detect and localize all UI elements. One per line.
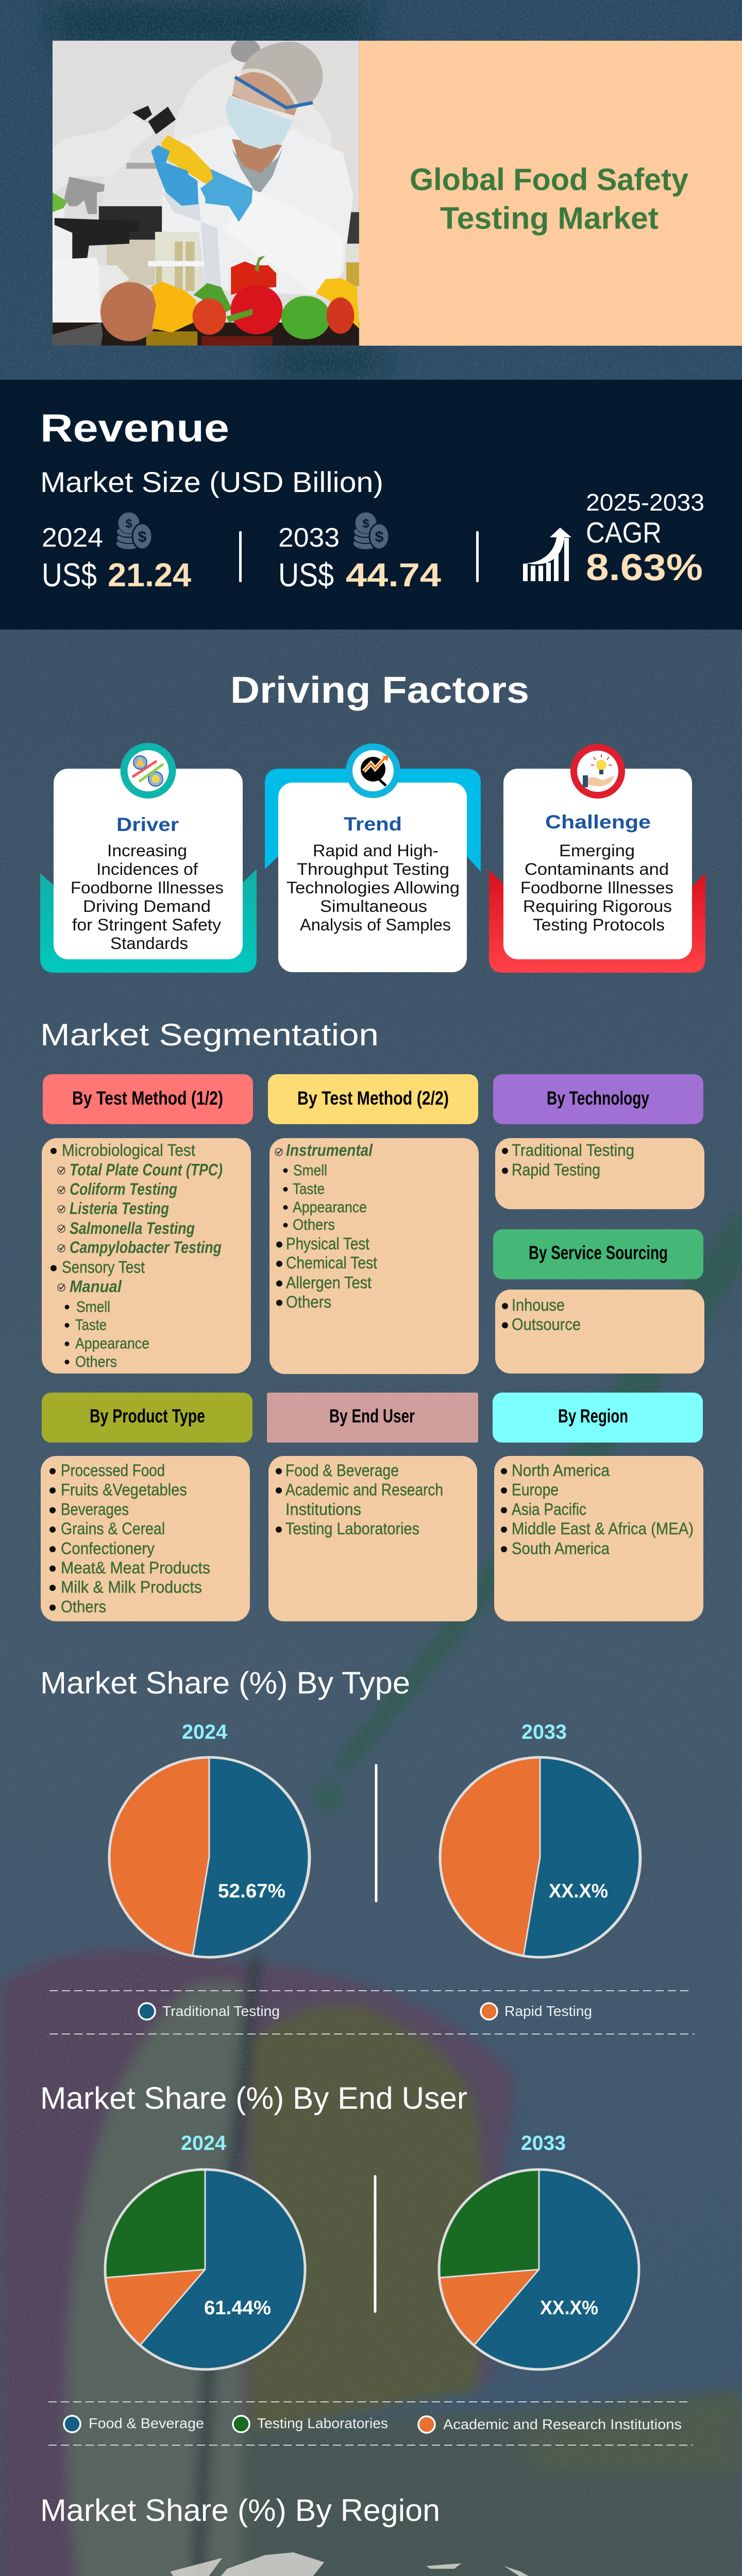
panel: test method list 2: Smell xyxy=(293,1162,327,1179)
panel: test method list 2: Appearance xyxy=(293,1199,367,1216)
driver text: Standards xyxy=(110,934,188,953)
challenge text: Foodborne Illnesses xyxy=(520,878,673,897)
icon: challenge badge xyxy=(570,744,625,799)
panel: test method list 1: Microbiological Test xyxy=(62,1141,195,1159)
panel: end user list xyxy=(268,1456,477,1621)
segment header: technology: By Technology xyxy=(547,1088,649,1109)
driver text: Driving Demand xyxy=(83,897,211,916)
segment header: product type: By Product Type xyxy=(90,1405,205,1427)
heading: market share by type: Market Share (%) By Type xyxy=(40,1666,410,1700)
pie chart: type 2024 xyxy=(109,1721,310,1957)
panel: test method list 2: Allergen Test xyxy=(286,1274,372,1292)
CAGR: CAGR xyxy=(586,516,662,549)
panel: test method list 2 xyxy=(269,1138,479,1374)
driver heading: Driver xyxy=(116,814,179,835)
panel: service sourcing list: Outsource xyxy=(512,1315,581,1334)
panel: test method list 1 xyxy=(42,1138,251,1374)
revenue 2024: US$ xyxy=(42,556,97,594)
panel: test method list 1: Others xyxy=(75,1353,117,1370)
panel: test method list 2: Instrumental xyxy=(286,1141,373,1159)
trend text: Rapid and High- xyxy=(313,841,439,860)
market size label: Market Size (USD Billion) xyxy=(40,466,383,498)
panel: region list: South America xyxy=(512,1539,610,1557)
panel: end user list: Academic and Research xyxy=(285,1480,443,1499)
icon: trend badge xyxy=(346,743,400,798)
driver text xyxy=(71,841,224,953)
panel: product type list: Confectionery xyxy=(61,1539,155,1557)
heading: market segmentation: Market Segmentation xyxy=(40,1018,379,1052)
panel: service sourcing list xyxy=(495,1290,704,1374)
challenge text: Contaminants and xyxy=(525,860,669,878)
title text: Testing Market xyxy=(440,201,659,235)
revenue 2024: 2024 xyxy=(42,523,103,553)
title background xyxy=(359,41,742,346)
segment header: test method 2: By Test Method (2/2) xyxy=(297,1088,449,1109)
heading: market share by end user: Market Share (%) By End User xyxy=(40,2081,467,2115)
panel: technology list: Rapid Testing xyxy=(512,1161,600,1179)
panel: test method list 1: Smell xyxy=(76,1298,110,1315)
segment header: test method 1: By Test Method (1/2) xyxy=(72,1088,223,1109)
panel: region list xyxy=(494,1456,703,1621)
trend text: Simultaneous xyxy=(320,897,427,916)
pie chart: end user 2024 xyxy=(105,2132,306,2369)
panel: region list: Europe xyxy=(512,1480,559,1499)
pie chart: type 2033: 2033 xyxy=(521,1721,567,1743)
panel: trend xyxy=(265,743,481,972)
legend: end user: Food & Beverage xyxy=(89,2415,204,2431)
legend: end user xyxy=(64,2415,682,2433)
segment header: end user: By End User xyxy=(329,1405,415,1427)
heading: driving factors: Driving Factors xyxy=(230,670,529,711)
legend: end user: Testing Laboratories xyxy=(257,2415,388,2431)
title text xyxy=(410,162,689,235)
pie chart: end user 2033: 2033 xyxy=(521,2132,566,2155)
panel: product type list: Grains & Cereal xyxy=(61,1519,165,1538)
panel: test method list 2: Physical Test xyxy=(286,1234,369,1253)
world map xyxy=(50,2552,684,2576)
revenue 2033: US$ xyxy=(278,556,334,594)
segment header: technology xyxy=(493,1074,703,1124)
revenue 2033 xyxy=(278,512,441,594)
panel: product type list: Fruits &Vegetables xyxy=(61,1480,187,1499)
title text: Global Food Safety xyxy=(410,162,689,197)
heading: market share by region: Market Share (%) By Region xyxy=(40,2493,440,2528)
revenue 2024: 21.24 xyxy=(108,556,191,594)
panel: region list: North America xyxy=(512,1461,610,1480)
panel: product type list: Others xyxy=(61,1598,106,1616)
panel: service sourcing list: Inhouse xyxy=(512,1296,565,1314)
panel: product type list: Beverages xyxy=(61,1500,129,1519)
pie chart: type 2024: 2024 xyxy=(182,1721,228,1743)
panel: region list: Middle East & Africa (MEA) xyxy=(512,1519,694,1538)
CAGR: 2025-2033 xyxy=(586,489,704,516)
trend text: Technologies Allowing xyxy=(286,878,460,897)
segment header: product type xyxy=(42,1393,252,1443)
challenge text: Emerging xyxy=(559,841,635,860)
revenue 2024 xyxy=(42,512,191,594)
panel: test method list 1: Manual xyxy=(70,1277,122,1296)
segment header: service sourcing xyxy=(493,1229,703,1279)
pie chart: type 2024: 52.67% xyxy=(218,1880,285,1902)
photo: food scientist inspecting corn xyxy=(53,39,359,346)
driver text: Foodborne Illnesses xyxy=(71,878,224,897)
segment header: service sourcing: By Service Sourcing xyxy=(529,1242,668,1263)
trend text xyxy=(286,841,460,934)
panel: test method list 1: Sensory Test xyxy=(62,1258,145,1277)
panel: test method list 1: Coliform Testing xyxy=(70,1180,177,1198)
segment header: end user xyxy=(267,1393,478,1443)
CAGR: 8.63% xyxy=(586,547,703,588)
panel: test method list 1: Salmonella Testing xyxy=(70,1219,195,1238)
trend text: Analysis of Samples xyxy=(300,916,451,934)
panel: test method list 1: Total Plate Count (TPC) xyxy=(70,1161,223,1179)
panel: test method list 1: Listeria Testing xyxy=(70,1199,169,1218)
legend: type: Rapid Testing xyxy=(504,2003,592,2019)
pie chart: type 2033: XX.X% xyxy=(549,1880,608,1902)
segment header: test method 2 xyxy=(268,1074,478,1124)
panel: driver xyxy=(40,743,257,973)
CAGR xyxy=(586,489,704,588)
revenue 2033: 44.74 xyxy=(346,556,441,594)
trend text: Throughput Testing xyxy=(297,860,449,878)
panel: region list: Asia Pacific xyxy=(512,1500,586,1519)
panel: test method list 2: Chemical Test xyxy=(286,1253,377,1272)
panel: test method list 1: Taste xyxy=(75,1317,107,1334)
panel: product type list: Processed Food xyxy=(61,1461,165,1480)
panel: test method list 1: Campylobacter Testing xyxy=(70,1238,222,1257)
pie chart: end user 2033: XX.X% xyxy=(540,2297,598,2319)
legend: type xyxy=(139,2003,592,2020)
challenge text: Testing Protocols xyxy=(533,916,665,934)
panel: end user list: Institutions xyxy=(285,1500,361,1519)
panel: product type list: Milk & Milk Products xyxy=(61,1578,202,1596)
panel: technology list xyxy=(495,1138,704,1209)
driver text: Incidences of xyxy=(96,860,198,878)
panel: challenge xyxy=(489,744,705,973)
icon: growth chart xyxy=(523,528,571,581)
pie chart: end user 2024: 61.44% xyxy=(204,2297,271,2319)
pie chart: type 2033 xyxy=(440,1721,641,1957)
revenue heading: Revenue xyxy=(40,406,229,450)
challenge text: Requiring Rigorous xyxy=(523,897,672,916)
legend: type: Traditional Testing xyxy=(162,2003,280,2019)
segment header: test method 1 xyxy=(43,1074,253,1124)
revenue 2033: 2033 xyxy=(278,523,340,553)
pie chart: end user 2024: 2024 xyxy=(181,2132,227,2155)
title panel xyxy=(53,39,742,346)
revenue band xyxy=(0,380,742,630)
pie chart: end user 2033 xyxy=(439,2132,639,2369)
panel: technology list: Traditional Testing xyxy=(512,1141,634,1159)
panel: test method list 2: Taste xyxy=(293,1181,325,1198)
panel: product type list: Meat& Meat Products xyxy=(61,1558,210,1577)
icon: driver badge xyxy=(121,743,176,799)
panel: end user list: Testing Laboratories xyxy=(285,1519,419,1538)
panel: end user list: Food & Beverage xyxy=(285,1461,399,1480)
segment header: region: By Region xyxy=(558,1405,628,1427)
panel: test method list 2: Others xyxy=(293,1216,335,1233)
legend: end user: Academic and Research Institutions xyxy=(443,2416,682,2432)
challenge heading: Challenge xyxy=(545,811,651,833)
panel: test method list 1: Appearance xyxy=(75,1335,149,1352)
trend heading: Trend xyxy=(344,814,402,835)
challenge text xyxy=(520,841,673,934)
driver text: for Stringent Safety xyxy=(72,916,221,934)
panel: product type list xyxy=(41,1456,250,1621)
driver text: Increasing xyxy=(107,841,187,860)
segment header: region xyxy=(493,1393,703,1443)
panel: test method list 2: Others xyxy=(286,1293,331,1311)
